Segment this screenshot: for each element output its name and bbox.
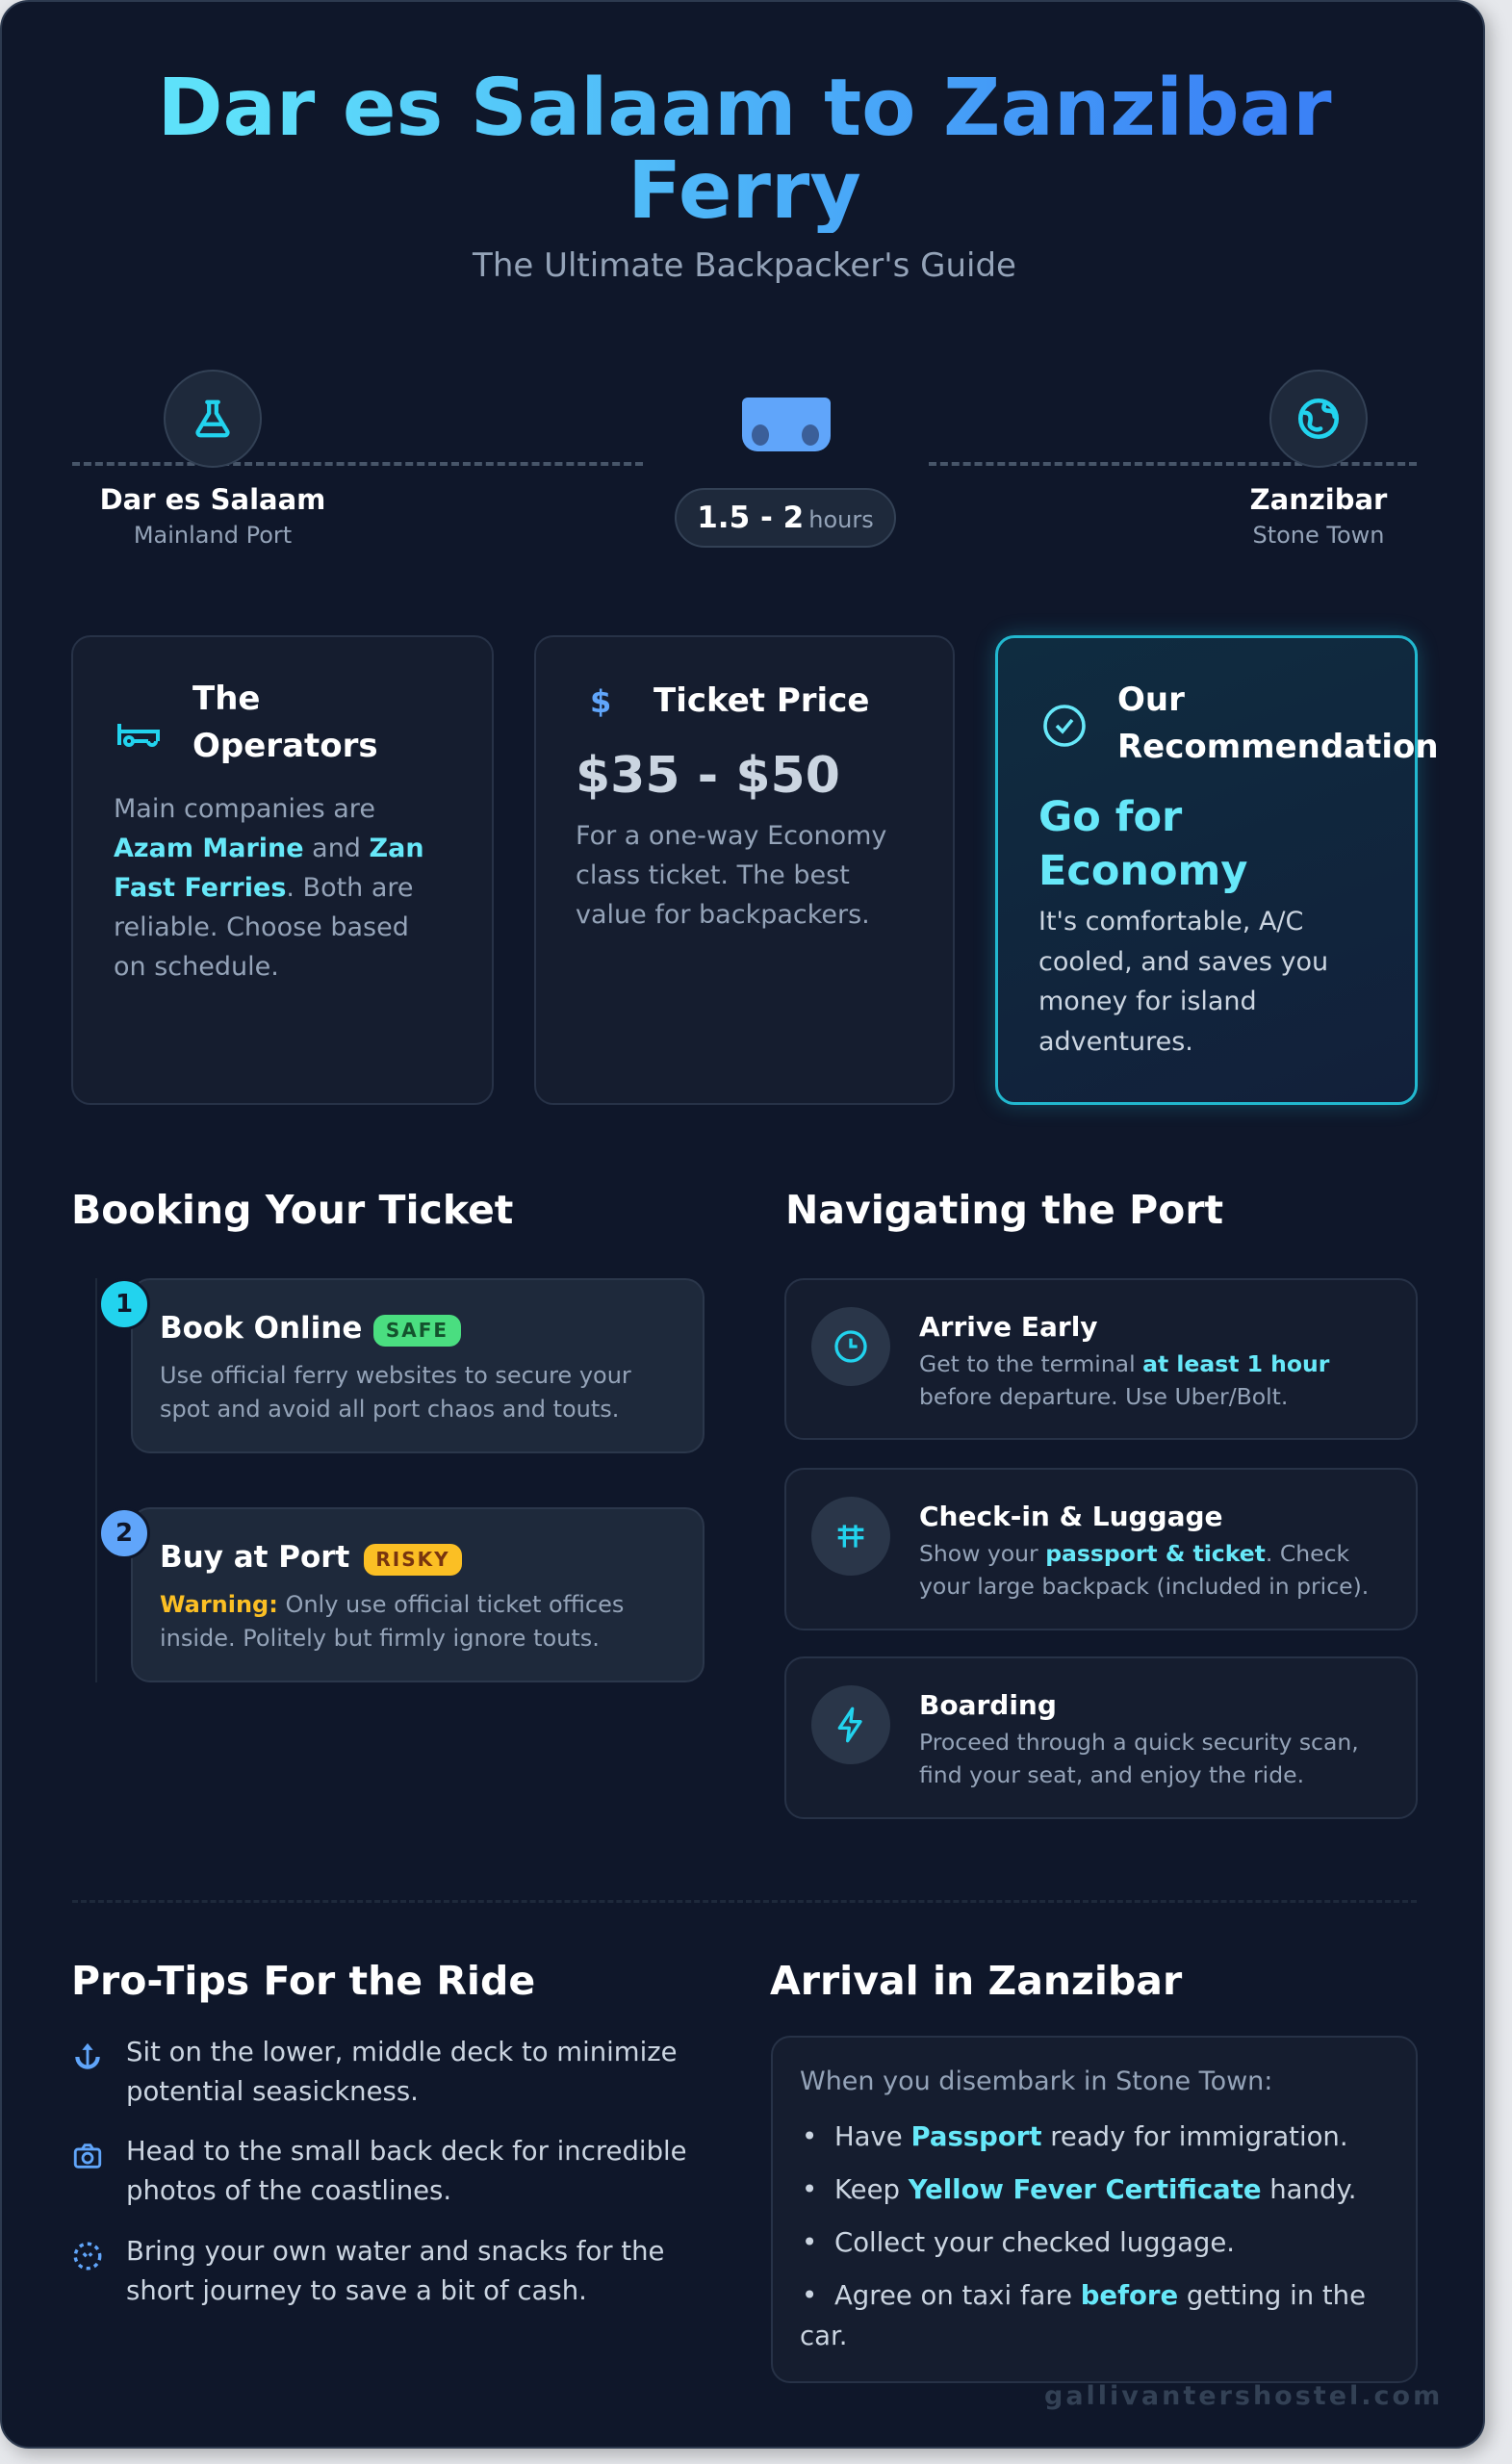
label: Dar es Salaam: Mainland Port [134,522,292,549]
panel: operators: Operators [192,727,378,765]
icon: flask departure [164,370,262,468]
heading: arrival: Arrival in Zanzibar [770,1958,1182,2004]
subtitle: The Ultimate Backpacker's Guide [473,246,1016,285]
panel: operators [71,635,494,1105]
title: Ferry [628,145,861,237]
panel: recommendation: Go for [1038,793,1182,841]
panel: arrival checklist: • [802,2121,817,2152]
panel: recommendation [995,635,1418,1105]
panel: arrival checklist: Have Passport ready for immigration. [834,2121,1348,2152]
label: Zanzibar: Zanzibar [1250,483,1387,516]
panel: recommendation: Recommendation [1117,728,1439,766]
panel: arrival checklist: • [802,2227,817,2258]
panel: operators: Main companies are Azam Marine and Zan Fast Ferries. Both are reliable. Choose based on schedule. [114,794,424,982]
step 2 buy at port: Buy at Port [160,1540,349,1575]
panel: arrival checklist: • [802,2280,817,2311]
tips list [73,2037,687,2306]
step 1 book online: Book Online [160,1311,362,1346]
panel: operators: The [192,680,260,718]
step 2 number: 2 [115,1519,133,1548]
icon: globe arrival [1269,370,1368,468]
panel: ticket price: Ticket Price [653,681,869,720]
panel: recommendation: Economy [1038,847,1247,895]
nav: boarding: Boarding [919,1689,1057,1721]
title [2,67,1487,233]
icon: check circle [1043,705,1086,747]
nav: arrive early [784,1278,1418,1440]
panel: arrival checklist: Agree on taxi fare before getting in the car. [800,2280,1366,2351]
step 2 number [98,1507,150,1559]
nav: boarding [784,1656,1418,1819]
panel: arrival checklist: Keep Yellow Fever Certificate handy. [834,2174,1357,2205]
footer watermark: gallivantershostel.com [1044,2381,1443,2411]
step 1 book online: Use official ferry websites to secure your spot and avoid all port chaos and touts. [160,1362,631,1423]
heading: pro-tips: Pro-Tips For the Ride [71,1958,535,2004]
label: Dar es Salaam [100,483,325,549]
nav: check-in: Show your passport & ticket. Check your large backpack (included in price). [919,1540,1369,1600]
panel: ticket price: $35 - $50 [576,747,840,805]
panel: ticket price: $ [590,683,611,720]
step 2 buy at port [131,1507,705,1682]
panel: recommendation: It's comfortable, A/C cooled, and saves you money for island adventures. [1038,907,1328,1057]
panel: ticket price: For a one-way Economy class ticket. The best value for backpackers. [576,821,886,930]
panel: recommendation: Our [1117,680,1185,719]
tip 1: Sit on the lower, middle deck to minimize potential seasickness. [126,2037,678,2107]
panel: arrival checklist [771,2036,1418,2383]
step 1 book online [131,1278,705,1453]
tip 2: Head to the small back deck for incredible photos of the coastlines. [126,2136,687,2206]
duration pill [675,488,896,548]
booking timeline [95,1278,705,1682]
panel: arrival checklist: When you disembark in Stone Town: [800,2066,1272,2096]
panel: ticket price [534,635,955,1105]
nav: arrive early: Arrive Early [919,1311,1098,1343]
step 1 book online: SAFE [386,1319,448,1342]
label: Zanzibar [1250,483,1388,549]
step 2 buy at port: RISKY [375,1548,450,1571]
icon: ferry [742,398,831,451]
step 1 number: 1 [115,1290,133,1319]
label: Dar es Salaam: Dar es Salaam [100,483,325,516]
duration pill: 1.5 - 2 hours [697,500,874,535]
tip 3: Bring your own water and snacks for the short journey to save a bit of cash. [126,2236,664,2306]
label: Zanzibar: Stone Town [1252,522,1385,549]
heading: booking: Booking Your Ticket [71,1187,513,1233]
nav: arrive early: Get to the terminal at least 1 hour before departure. Use Uber/Bolt. [919,1350,1329,1410]
panel: arrival checklist: • [802,2174,817,2205]
title: Dar es Salaam to Zanzibar [157,63,1332,154]
panel: arrival checklist: Collect your checked luggage. [834,2227,1235,2258]
heading: navigating: Navigating the Port [785,1187,1223,1233]
icon: car [117,724,160,747]
nav: check-in [784,1468,1418,1630]
route timeline [72,370,1417,549]
nav: check-in: Check-in & Luggage [919,1501,1223,1532]
nav: boarding: Proceed through a quick security scan, find your seat, and enjoy the ride. [919,1729,1359,1788]
step 1 number [98,1278,150,1330]
step 2 buy at port: Warning: Only use official ticket offices inside. Politely but firmly ignore touts. [160,1591,624,1652]
